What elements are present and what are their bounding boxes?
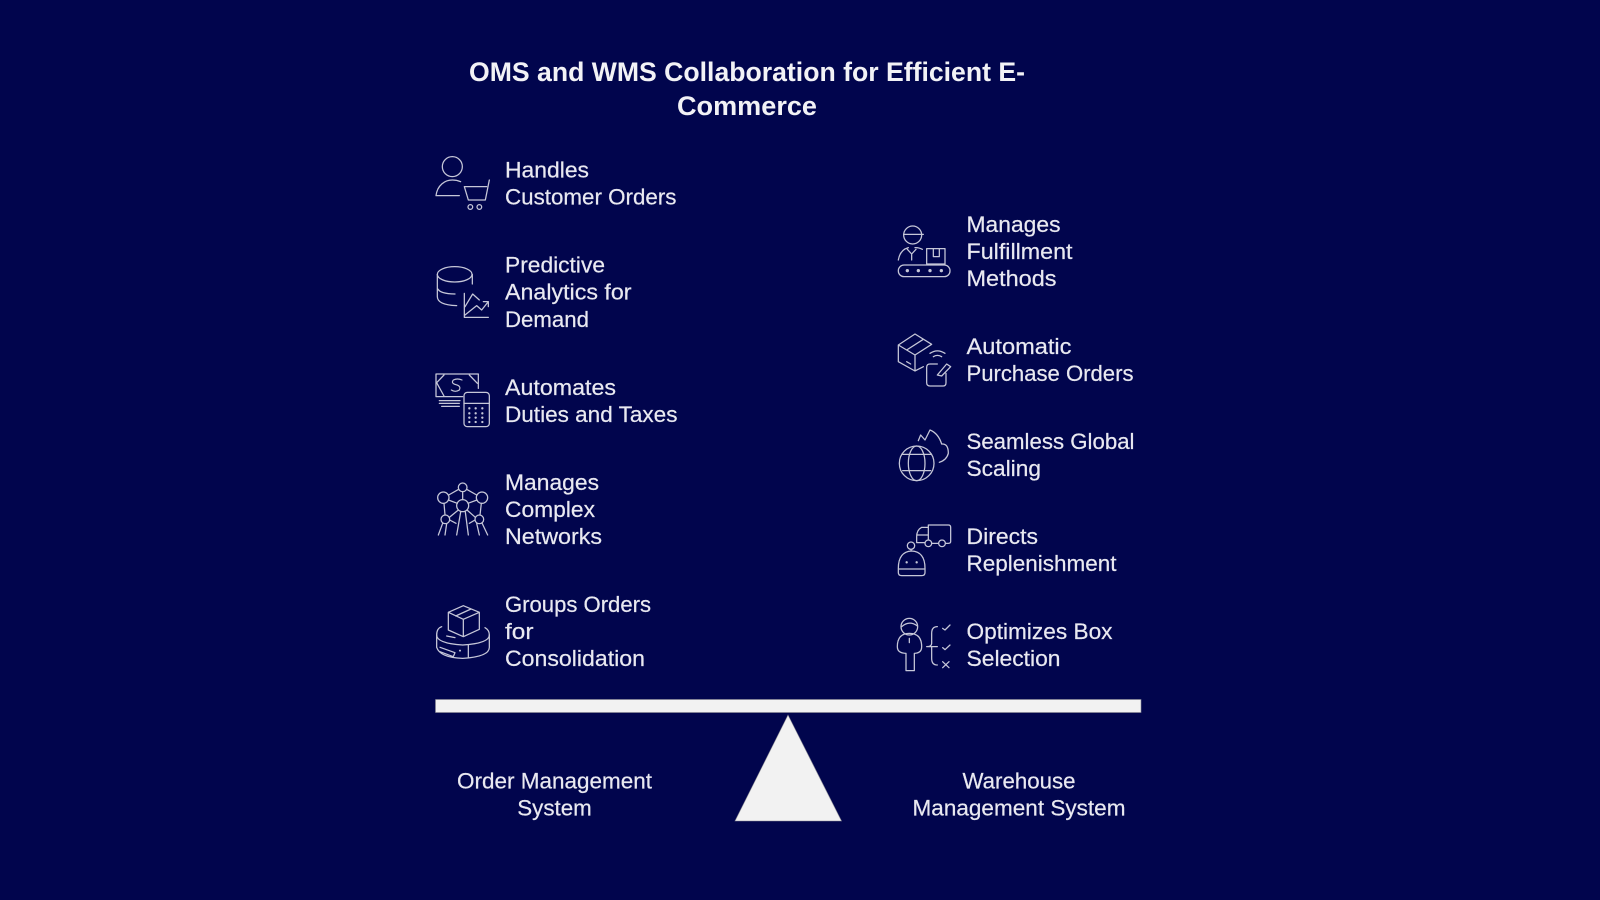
icon: worker and conveyor [898, 226, 950, 277]
text: handles customer orders [505, 158, 676, 210]
label: warehouse management system [912, 768, 1126, 820]
label: warehouse management system: Management System [912, 796, 1126, 820]
text: manages complex networks [505, 470, 602, 549]
label: order management system [457, 768, 652, 820]
text: manages fulfillment methods: Methods [966, 266, 1056, 291]
text: manages complex networks: Manages [505, 470, 599, 495]
icon: box and tablet [898, 334, 951, 386]
text: manages fulfillment methods: Manages [966, 212, 1060, 237]
text: automatic purchase orders: Purchase Orders [966, 361, 1134, 386]
text: automates duties and taxes: Automates [505, 375, 616, 400]
balance fulcrum [735, 715, 842, 821]
text: predictive analytics for demand [505, 252, 632, 332]
text: predictive analytics for demand: Demand [505, 307, 589, 332]
text: directs replenishment: Directs [966, 524, 1038, 549]
icon: cash and calculator [436, 374, 489, 427]
text: seamless global scaling [966, 429, 1134, 481]
text: groups orders for consolidation [505, 592, 651, 671]
text: manages fulfillment methods [966, 212, 1072, 291]
icon: globe and flame [899, 430, 948, 481]
text: groups orders for consolidation: for [505, 619, 534, 644]
text: handles customer orders: Customer Orders [505, 184, 676, 210]
title: OMS and WMS Collaboration for Efficient E- [469, 57, 1025, 87]
text: automates duties and taxes: Duties and Taxes [505, 402, 678, 427]
title: Commerce [677, 91, 817, 121]
text: directs replenishment: Replenishment [966, 551, 1116, 576]
icon: customer and shopping cart [436, 157, 489, 209]
text: automatic purchase orders: Automatic [966, 334, 1072, 359]
text: automatic purchase orders [966, 334, 1134, 386]
label: order management system: System [517, 796, 592, 820]
icon: person with checklist [897, 618, 950, 671]
title [469, 57, 1025, 121]
icon: box on platform [437, 606, 489, 658]
balance beam [436, 700, 1141, 712]
text: automates duties and taxes [505, 375, 678, 427]
text: optimizes box selection [966, 619, 1112, 671]
panel: order management system features [436, 157, 678, 671]
text: optimizes box selection: Selection [966, 646, 1060, 671]
text: handles customer orders: Handles [505, 158, 589, 182]
text: directs replenishment [966, 524, 1116, 576]
text: predictive analytics for demand: Analytics for [505, 280, 632, 305]
icon: database and chart [437, 267, 488, 317]
icon: network structure [438, 483, 488, 535]
icon: robot and truck [898, 525, 951, 576]
text: manages complex networks: Complex [505, 497, 595, 522]
text: manages complex networks: Networks [505, 524, 602, 549]
label: order management system: Order Management [457, 768, 652, 794]
text: seamless global scaling: Seamless Global [966, 429, 1134, 454]
label: warehouse management system: Warehouse [962, 768, 1076, 794]
text: groups orders for consolidation: Groups Orders [505, 592, 651, 617]
panel: warehouse management system features [897, 212, 1134, 671]
text: seamless global scaling: Scaling [966, 456, 1041, 481]
text: groups orders for consolidation: Consolidation [505, 646, 645, 671]
text: predictive analytics for demand: Predictive [505, 252, 605, 278]
text: optimizes box selection: Optimizes Box [966, 619, 1112, 644]
text: manages fulfillment methods: Fulfillment [966, 239, 1072, 264]
